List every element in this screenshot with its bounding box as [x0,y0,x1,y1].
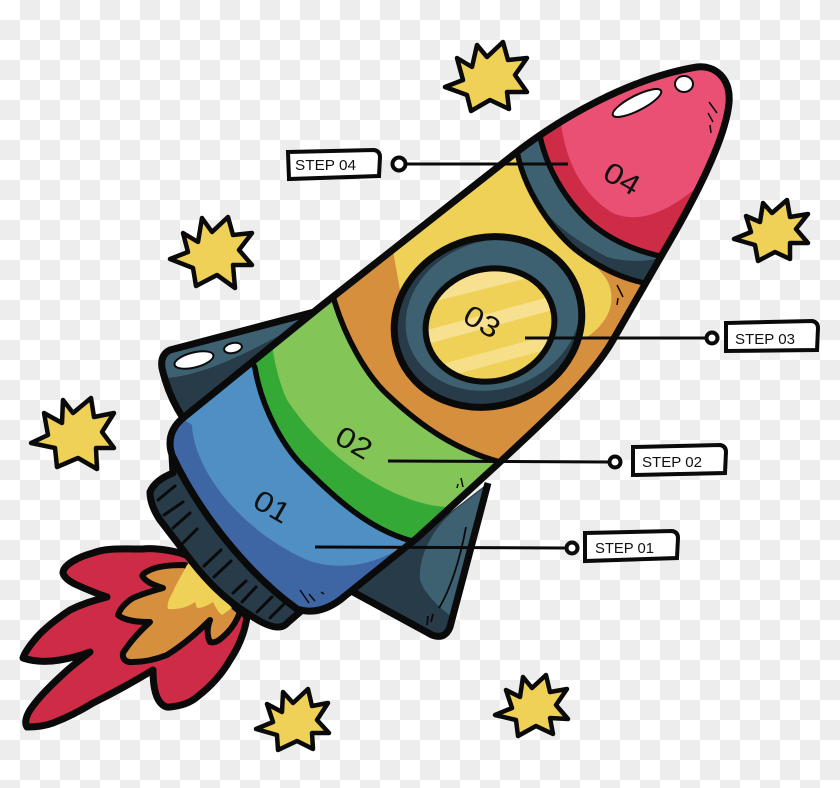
hand-drawn marks [300,102,717,603]
fin highlight [173,341,243,372]
callout: step 04 [288,150,568,179]
star: bottom right [495,675,568,736]
callout: step 02 [388,445,726,475]
star: bottom left [256,689,329,750]
callout: step 02: STEP 02 [642,454,702,471]
star: left [31,398,114,469]
nozzle [150,455,300,627]
nose highlights [610,76,693,122]
porthole stripes [428,271,550,374]
flame [23,549,247,727]
number 02: 02 [330,420,378,467]
left fin [162,311,318,418]
rocket body [166,63,733,615]
number 03: 03 [458,299,506,346]
callout: step 04: STEP 04 [295,157,356,174]
body outline [170,67,729,611]
star: upper left [170,217,252,288]
callout: step 03: STEP 03 [735,331,795,348]
callout: step 01: STEP 01 [595,540,654,557]
star: right [734,200,808,261]
number 04: 04 [598,156,646,203]
callout: step 03 [525,321,818,351]
body colour sections [174,70,726,608]
right fin [353,483,490,636]
callout: step 01 [315,531,678,561]
number 01: 01 [248,484,296,531]
section divider lines [245,125,664,541]
porthole [390,233,586,411]
star: top [445,42,527,111]
